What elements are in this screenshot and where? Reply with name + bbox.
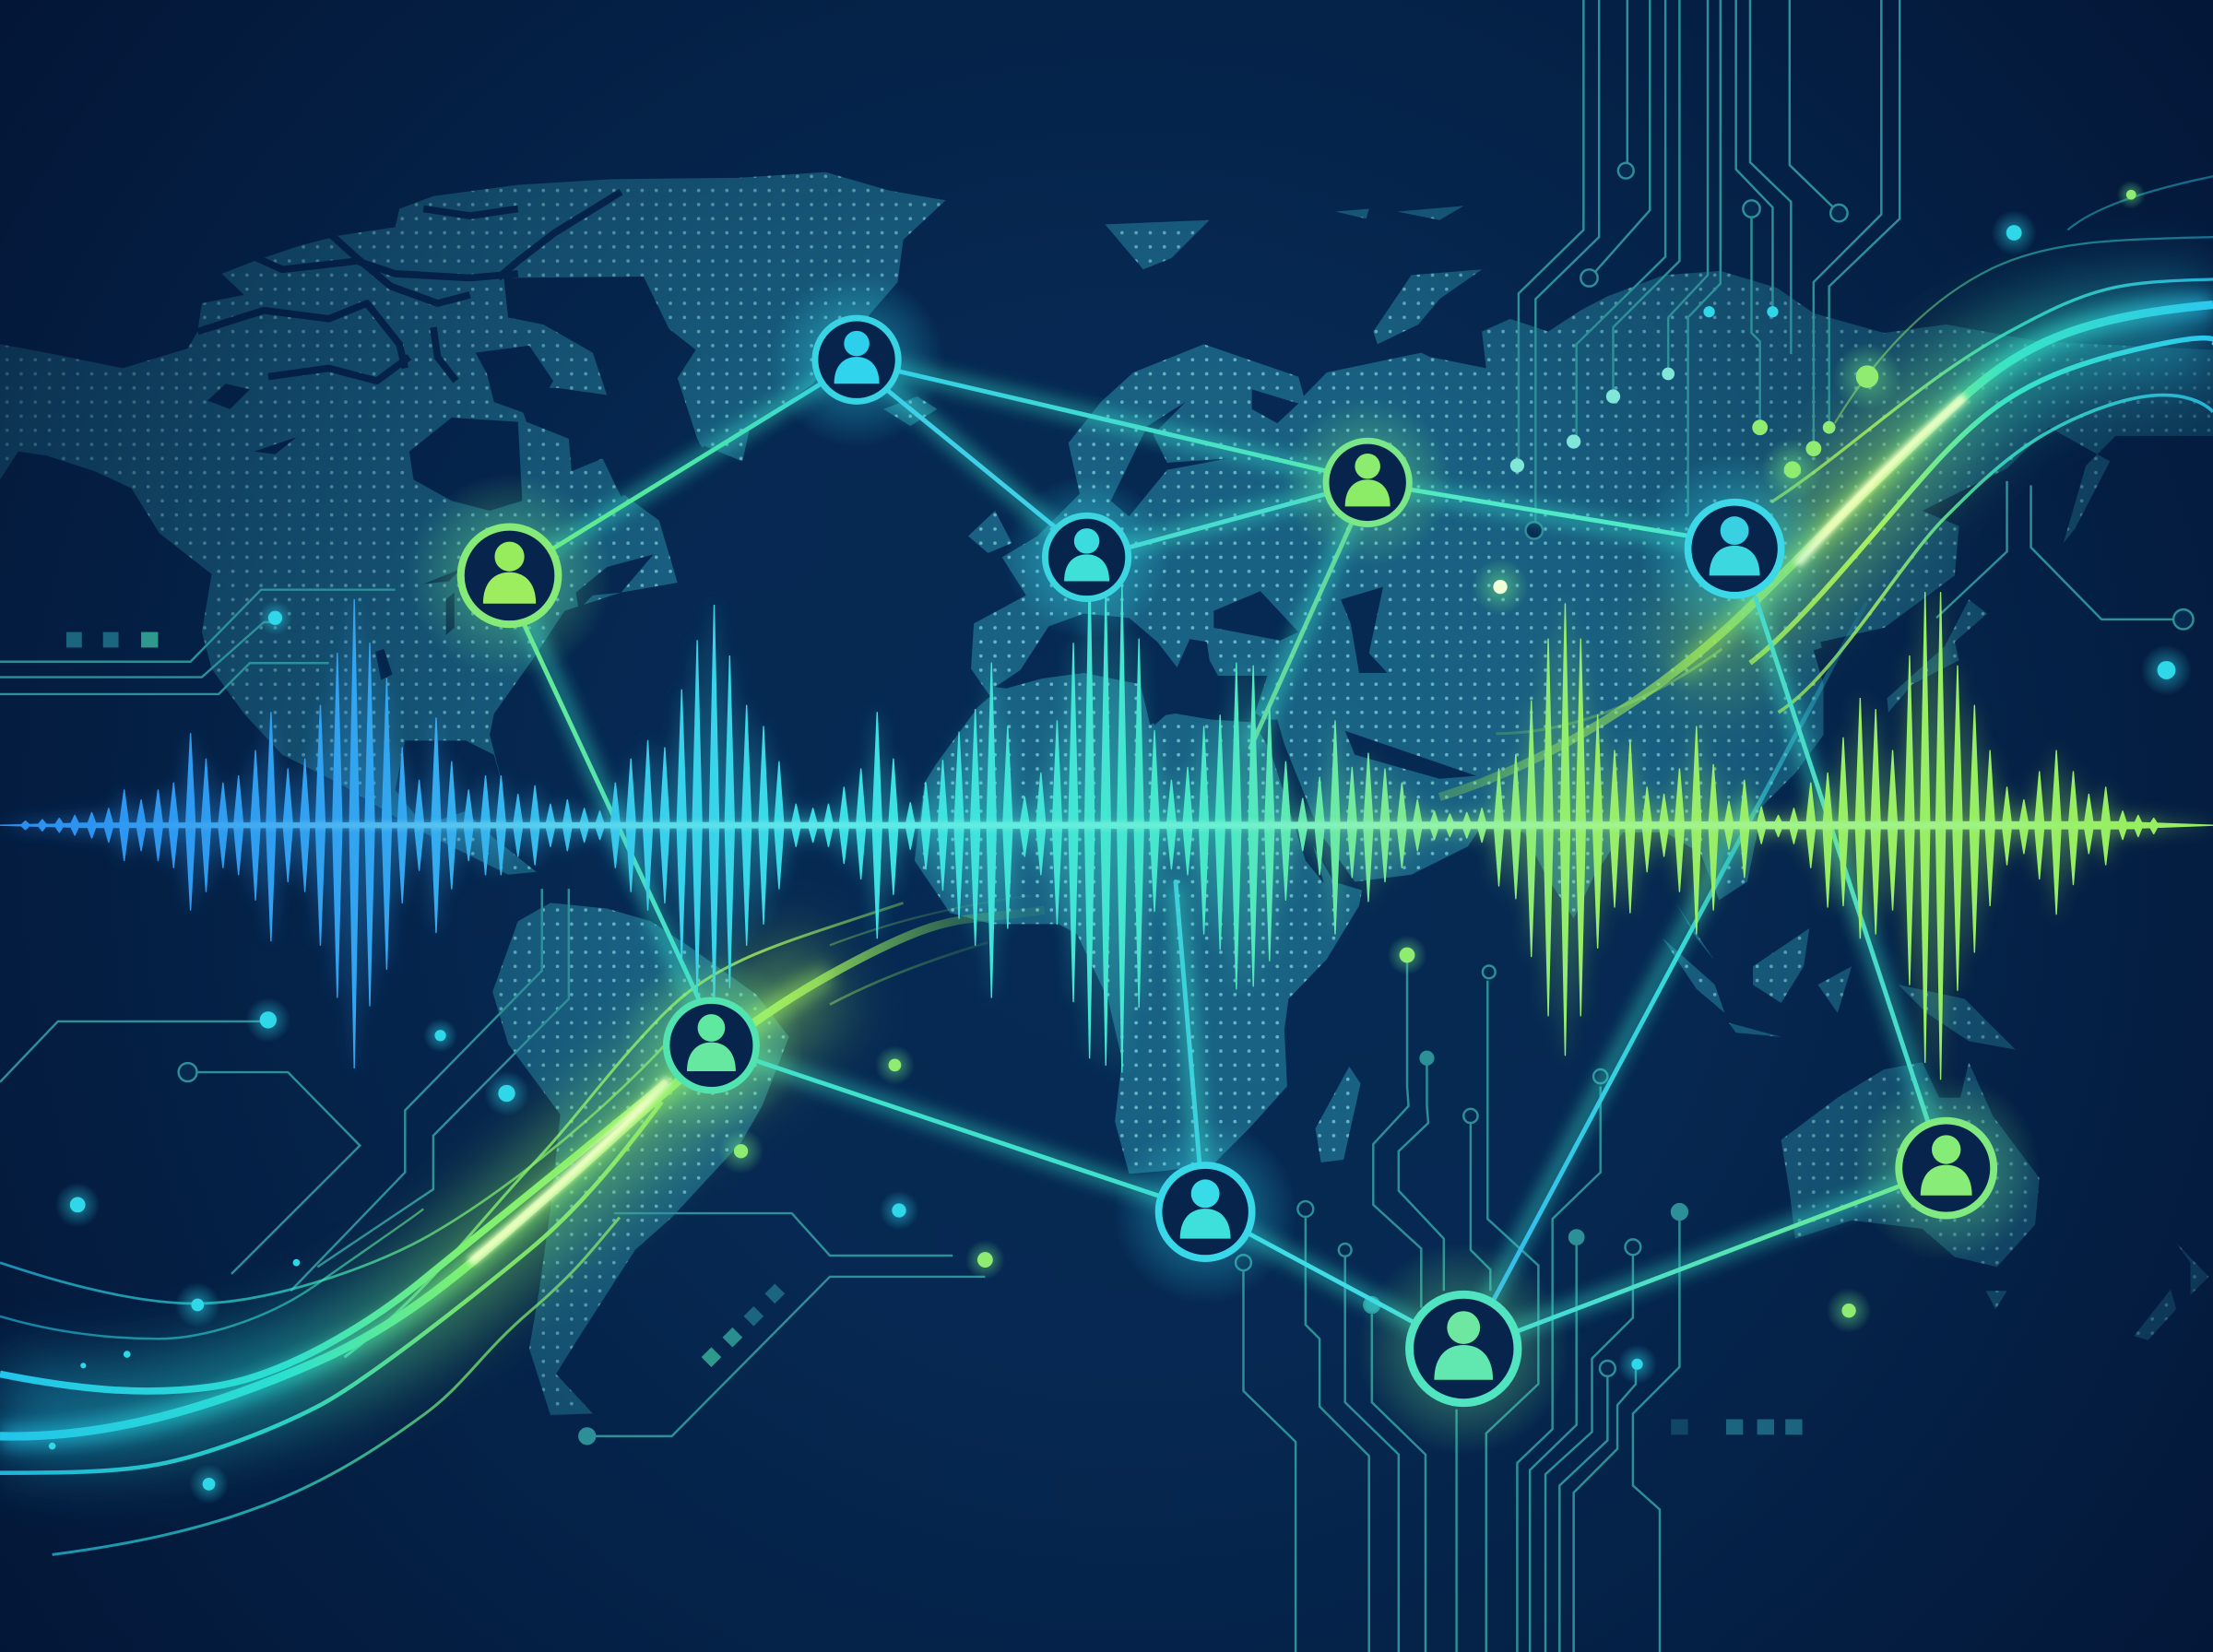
map: Southeast Asia islands [1663,904,2016,1050]
link: hub to australia [1516,1185,1902,1332]
map: North America and Greenland [0,172,946,875]
map: Africa [915,673,1362,1174]
link: europe to russia [1129,494,1327,548]
link: africa to hub [1248,1233,1415,1323]
link: asia to australia [1756,598,1929,1126]
link: greenland to russia [897,371,1327,471]
circuit nodes: bottom centre [1236,966,1687,1376]
link: europe to africa [1176,881,1200,1165]
ribbon core: right [1800,399,1962,561]
node: Africa [1114,1120,1297,1304]
map: Eurasia [971,271,2213,918]
circuit nodes: top right [1526,163,2194,630]
link: greenland to europe [886,389,1056,527]
map: Arctic islands [1105,206,1482,344]
particle halos: cyan [55,210,2192,1504]
ribbon wide glow: right [1679,324,2213,674]
node: Greenland [769,272,944,447]
map: Madagascar [1316,1067,1361,1162]
link: south america to africa [756,1061,1160,1197]
person nodes [408,272,2040,1455]
ribbon wide glow: left [0,974,830,1415]
map: Iceland and Britain [883,396,1012,553]
map: inland seas and bays [207,277,1884,883]
circuit traces: left and lower edges [0,590,985,1444]
ribbon core: left [473,1082,666,1260]
world map [0,172,2213,1415]
circuit traces: top right [1519,0,2194,630]
right light ribbons [1439,176,2213,797]
waveform glow [0,557,2213,1080]
audio waveform [0,557,2213,1080]
map: Australia [1781,1062,2040,1267]
node: Russia [1283,398,1452,567]
circuit traces: bottom centre [1236,960,1687,1652]
map: Japan [1887,599,1987,713]
bright spark [1493,580,1508,594]
node: hub [1357,1243,1570,1455]
node: South America [620,954,803,1137]
ribbon soft glow: right [1679,305,2213,674]
particle cores: cyan [49,225,2175,1491]
decorative squares [66,632,1803,1434]
map: Tasmania and New Zealand [1986,1243,2208,1340]
link: russia downward [1250,522,1352,748]
link: hub to asia [1493,604,1865,1301]
map: South America [492,903,789,1415]
map: Canadian archipelago channels [197,192,621,381]
link: north america to greenland [550,381,825,550]
network connections [525,371,1929,1332]
particle cores: pale teal [1510,368,1675,473]
node: Asia [1639,454,1829,643]
glowing particles [49,181,2192,1504]
network connections glow [510,360,1947,1349]
node: Europe [1005,476,1168,639]
waveform spikes [0,557,2213,1080]
waveform centre highlight [85,822,2117,828]
node: North America [408,473,612,678]
particle halos: green [718,181,2146,1333]
link: north to south america [525,626,700,1002]
particle cores: green [734,190,2136,1317]
node: Australia [1853,1075,2040,1261]
left light ribbons [0,896,1045,1554]
link: russia to asia [1410,490,1689,537]
ribbon soft glow: left [0,974,830,1436]
circuit nodes: left and lower edges [179,1063,595,1444]
